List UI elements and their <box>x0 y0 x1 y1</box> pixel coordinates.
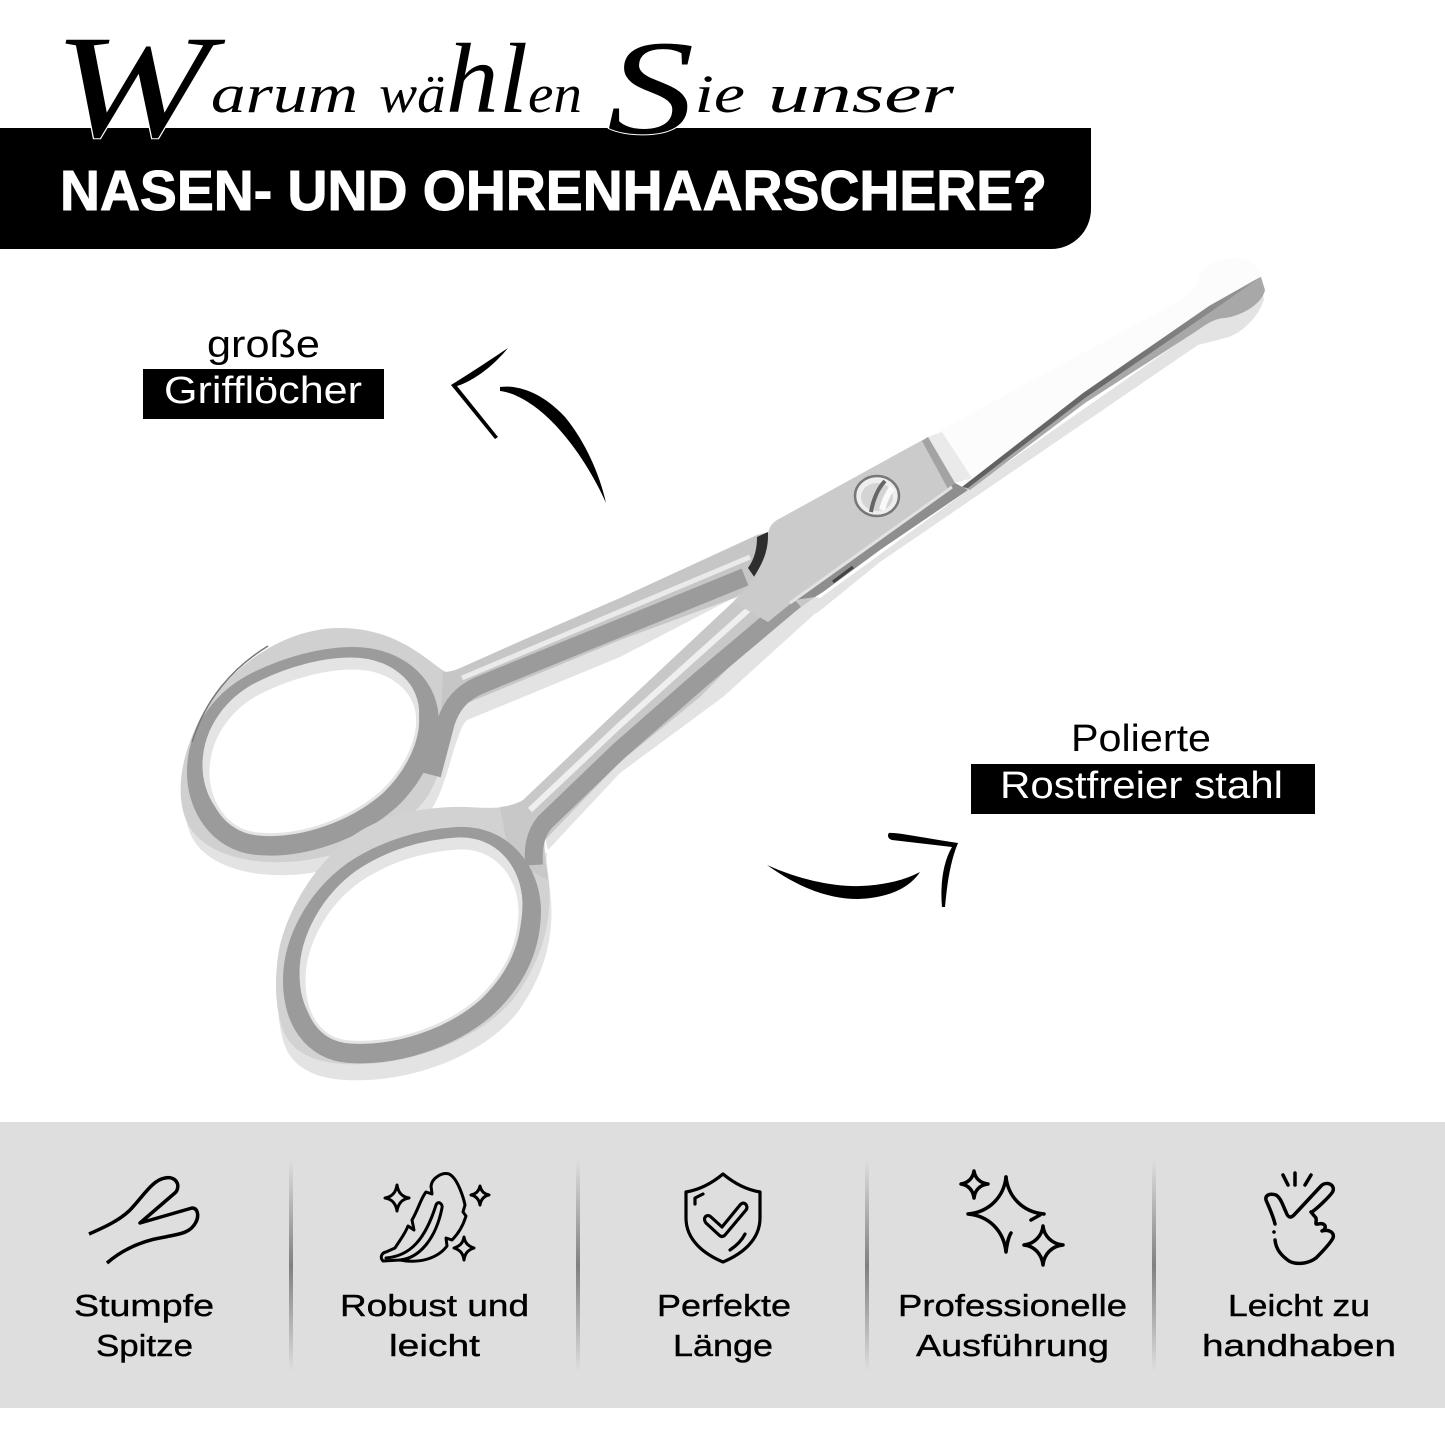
crescent notch <box>748 532 769 578</box>
feature: Stumpfe Spitze: Stumpfe <box>74 1288 214 1323</box>
feature: Stumpfe Spitze: Spitze <box>96 1328 193 1363</box>
script title: arum <box>211 64 358 124</box>
feature: Leicht zu handhaben: Leicht zu <box>1228 1288 1370 1323</box>
scissors <box>181 258 1265 1080</box>
icon: snapping hand <box>1266 1173 1333 1263</box>
upper handle <box>181 532 769 862</box>
script title: ie <box>694 64 745 124</box>
arrow: to grips <box>451 348 606 503</box>
headline banner <box>0 128 1091 249</box>
pivot screw <box>855 476 899 516</box>
feature: Perfekte Länge <box>657 1174 791 1363</box>
feature: Leicht zu handhaben <box>1202 1173 1396 1363</box>
icon: sparkles <box>961 1171 1063 1265</box>
scissors shadow <box>185 285 1264 1080</box>
feature panel <box>0 1122 1445 1408</box>
callout: große Grifflöcher <box>143 324 384 419</box>
pivot plate <box>733 437 968 622</box>
feature: Robust und leicht: leicht <box>389 1328 480 1363</box>
feature: Leicht zu handhaben: handhaben <box>1202 1328 1396 1363</box>
feature: Perfekte Länge: Länge <box>673 1328 773 1363</box>
icon: shield with check <box>686 1174 760 1262</box>
callout: Polierte Rostfreier stahl <box>971 718 1315 814</box>
feature: Professionelle Ausführung: Professionelle <box>898 1288 1127 1323</box>
arrow: to steel <box>767 833 958 907</box>
banner heading: NASEN- UND OHRENHAARSCHERE? <box>60 159 1047 223</box>
script title: wählen <box>379 23 582 134</box>
script title: W <box>53 5 226 168</box>
feature: Perfekte Länge: Perfekte <box>657 1288 791 1323</box>
callout: Polierte Rostfreier stahl: Rostfreier stahl <box>1000 765 1283 807</box>
script title: S <box>607 14 694 163</box>
script title <box>53 5 956 168</box>
callout: große Grifflöcher: große <box>207 324 320 366</box>
lower handle <box>276 578 815 1064</box>
icon: blunt tip <box>89 1178 198 1263</box>
feature: Professionelle Ausführung: Ausführung <box>916 1328 1109 1363</box>
feature: Robust und leicht <box>340 1174 529 1363</box>
callout: große Grifflöcher: Grifflöcher <box>164 370 362 412</box>
blade tip and edge <box>928 258 1265 490</box>
script title: unser <box>768 64 956 124</box>
feature: Stumpfe Spitze <box>74 1178 214 1363</box>
feature: Robust und leicht: Robust und <box>340 1288 529 1323</box>
callout: Polierte Rostfreier stahl: Polierte <box>1071 718 1211 760</box>
feature: Professionelle Ausführung <box>898 1171 1127 1363</box>
icon: feather with sparkles <box>381 1174 489 1261</box>
